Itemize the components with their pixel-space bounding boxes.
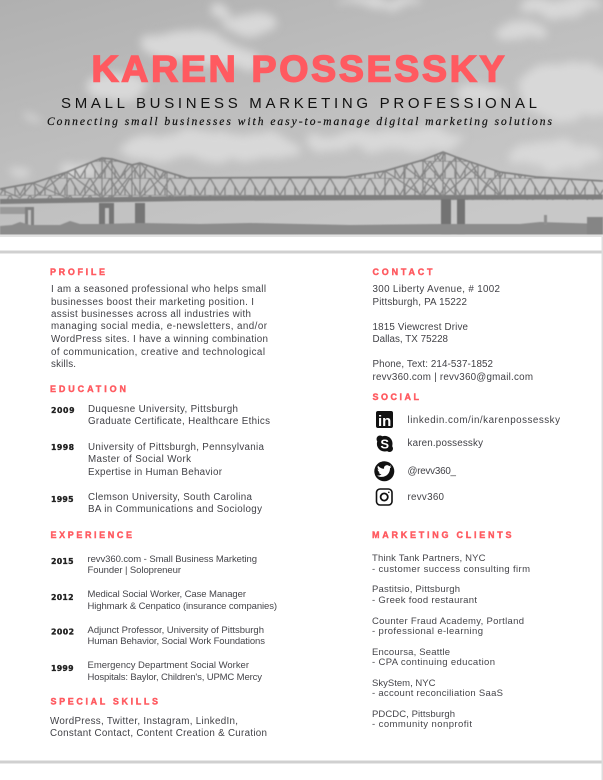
experience entry 2002: 2002 bbox=[51, 628, 74, 636]
heading: social: SOCIAL bbox=[372, 392, 420, 402]
icon: skype bbox=[376, 436, 393, 452]
experience entry 2002: Adjunct Professor, University of Pittsburgh bbox=[88, 625, 264, 636]
client: pdcdc: - community nonprofit bbox=[372, 719, 472, 730]
twitter handle: @revv360_ bbox=[408, 466, 457, 477]
experience entry 2015 bbox=[51, 554, 257, 576]
heading: profile: PROFILE bbox=[50, 267, 105, 277]
client: think tank partners bbox=[372, 553, 530, 575]
contact details: Phone, Text: 214-537-1852 bbox=[372, 359, 493, 370]
client: encoursa: - CPA continuing education bbox=[372, 657, 495, 668]
client: pdcdc: PDCDC, Pittsburgh bbox=[372, 709, 455, 720]
bridge bbox=[0, 150, 603, 236]
skills text: Constant Contact, Content Creation & Curation bbox=[50, 728, 267, 739]
profile text: WordPress sites. I have a winning combination bbox=[51, 334, 268, 345]
panel: right column bbox=[372, 267, 560, 730]
contact details: Pittsburgh, PA 15222 bbox=[372, 297, 467, 308]
profile text: skills. bbox=[51, 359, 76, 370]
education entry 1995 bbox=[51, 492, 262, 515]
divider: right edge bbox=[602, 237, 603, 780]
skills text: WordPress, Twitter, Instagram, LinkedIn, bbox=[50, 716, 238, 727]
client: encoursa bbox=[372, 647, 495, 668]
heading: experience: EXPERIENCE bbox=[50, 530, 132, 540]
header photo: clouds and bridge bbox=[0, 0, 603, 237]
experience entry 2015: revv360.com - Small Business Marketing bbox=[88, 554, 257, 565]
education entry 2009: 2009 bbox=[51, 406, 74, 415]
skype handle: karen.possessky bbox=[408, 438, 483, 449]
contact details: Dallas, TX 75228 bbox=[372, 334, 449, 345]
client: pastitsio: Pastitsio, Pittsburgh bbox=[372, 584, 460, 595]
client: counter fraud academy: - professional e-learning bbox=[372, 626, 483, 637]
linkedin handle: linkedin.com/in/karenpossessky bbox=[408, 415, 560, 426]
education entry 2009 bbox=[51, 404, 270, 427]
experience entry 2015: Founder | Solopreneur bbox=[88, 565, 181, 576]
education entry 1998 bbox=[51, 442, 265, 478]
education entry 1995: BA in Communications and Sociology bbox=[88, 504, 262, 515]
subtitle: SMALL BUSINESS MARKETING PROFESSIONAL bbox=[61, 95, 537, 112]
heading: special skills: SPECIAL SKILLS bbox=[50, 696, 158, 706]
education entry 1998: University of Pittsburgh, Pennsylvania bbox=[88, 442, 265, 453]
experience entry 1999: Hospitals: Baylor, Children's, UPMC Mercy bbox=[88, 672, 262, 683]
client: skystem: SkyStem, NYC bbox=[372, 678, 436, 689]
instagram handle: revv360 bbox=[408, 492, 445, 503]
panel: left column bbox=[50, 267, 277, 739]
profile text: I am a seasoned professional who helps small bbox=[51, 284, 266, 295]
client: skystem: - account reconciliation SaaS bbox=[372, 688, 503, 699]
contact details: 300 Liberty Avenue, # 1002 bbox=[372, 284, 500, 295]
client: pastitsio bbox=[372, 584, 477, 606]
client: skystem bbox=[372, 678, 503, 699]
heading: contact: CONTACT bbox=[372, 267, 433, 277]
tagline: Connecting small businesses with easy-to-manage digital marketing solutions bbox=[47, 116, 553, 128]
icon: skype: S bbox=[380, 436, 389, 452]
clouds bbox=[6, 0, 603, 179]
divider: bottom bbox=[0, 760, 603, 764]
experience entry 1999: 1999 bbox=[51, 664, 74, 673]
experience entry 2012: Highmark & Cenpatico (insurance companies) bbox=[88, 601, 277, 612]
icon: instagram bbox=[376, 489, 392, 505]
experience entry 2002: Human Behavior, Social Work Foundations bbox=[88, 636, 265, 647]
profile text: of communication, creative and technological bbox=[51, 347, 265, 358]
client: counter fraud academy: Counter Fraud Academy, Portland bbox=[372, 616, 524, 627]
experience entry 2012: Medical Social Worker, Case Manager bbox=[88, 589, 246, 600]
education entry 1995: 1995 bbox=[51, 495, 74, 504]
client: counter fraud academy bbox=[372, 616, 524, 637]
experience entry 1999: Emergency Department Social Worker bbox=[88, 660, 249, 671]
education entry 2009: Duquesne University, Pittsburgh bbox=[88, 404, 238, 415]
client: pastitsio: - Greek food restaurant bbox=[372, 595, 477, 606]
heading: marketing clients: MARKETING CLIENTS bbox=[372, 530, 512, 540]
experience entry 2015: 2015 bbox=[51, 557, 74, 566]
client: pdcdc bbox=[372, 709, 472, 730]
profile text: managing social media, e-newsletters, and/or bbox=[51, 321, 268, 332]
icon: twitter bbox=[374, 461, 394, 481]
client: think tank partners: - customer success consulting firm bbox=[372, 564, 530, 575]
client: encoursa: Encoursa, Seattle bbox=[372, 647, 450, 658]
client: think tank partners: Think Tank Partners, NYC bbox=[372, 553, 486, 564]
experience entry 1999 bbox=[51, 660, 262, 683]
icon: linkedin: in bbox=[378, 413, 391, 430]
education entry 1998: Master of Social Work bbox=[88, 454, 191, 465]
profile text: assist businesses across all industries with bbox=[51, 309, 251, 320]
education entry 1998: 1998 bbox=[51, 443, 74, 452]
experience entry 2012 bbox=[51, 589, 277, 612]
contact details bbox=[372, 284, 533, 383]
profile text bbox=[51, 284, 268, 370]
education entry 2009: Graduate Certificate, Healthcare Ethics bbox=[88, 416, 270, 427]
contact details: 1815 Viewcrest Drive bbox=[372, 322, 469, 333]
education entry 1995: Clemson University, South Carolina bbox=[88, 492, 253, 503]
divider: top bbox=[0, 250, 603, 254]
profile text: businesses boost their marketing position. I bbox=[51, 297, 254, 308]
education entry 1998: Expertise in Human Behavior bbox=[88, 467, 223, 478]
title: KAREN POSSESSKY bbox=[92, 48, 504, 90]
contact details: revv360.com | revv360@gmail.com bbox=[372, 372, 533, 383]
heading: education: EDUCATION bbox=[50, 384, 126, 394]
experience entry 2002 bbox=[51, 625, 265, 647]
skills text bbox=[50, 716, 267, 739]
experience entry 2012: 2012 bbox=[51, 593, 74, 602]
